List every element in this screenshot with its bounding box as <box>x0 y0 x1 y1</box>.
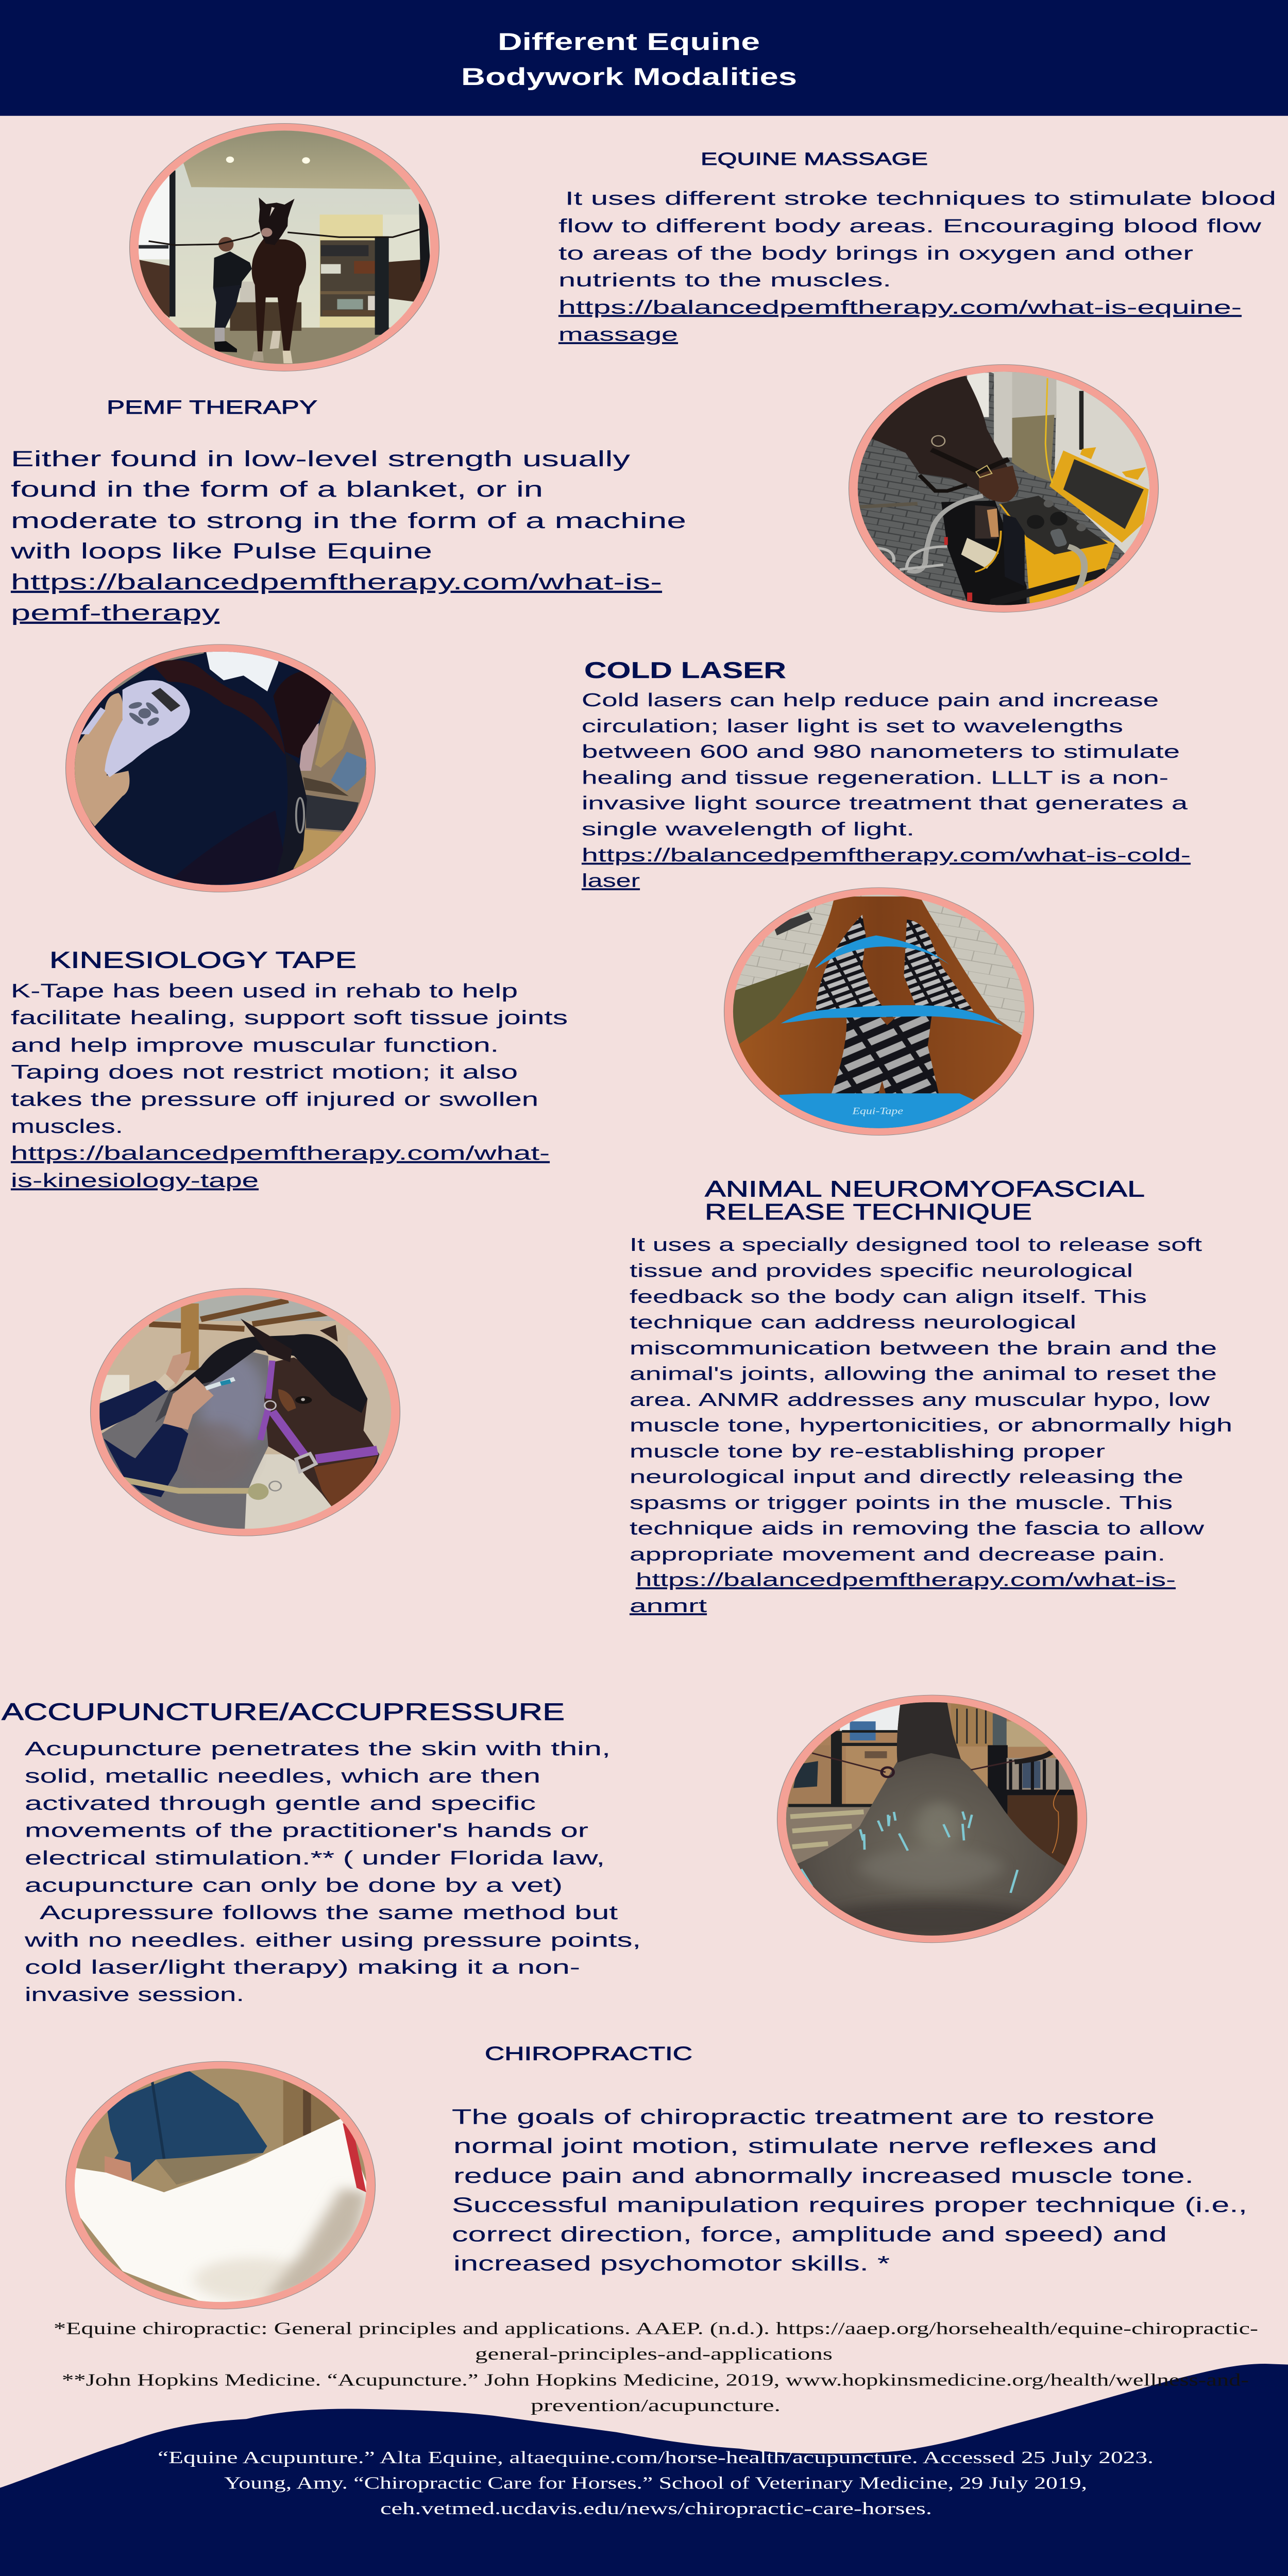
text: pemf therapy: pemf-therapy <box>11 601 219 625</box>
text: pemf therapy: found in the form of a blanket, or in <box>11 478 543 502</box>
references: dark: prevention/acupuncture. <box>531 2396 781 2415</box>
text: anmr: feedback so the body can align itself. This <box>630 1286 1147 1307</box>
text: pemf therapy: Either found in low-level strength usually <box>11 447 630 471</box>
text: anmr: https://balancedpemftherapy.com/what-is- <box>636 1569 1176 1590</box>
text: anmr: area. ANMR addresses any muscular hypo, low <box>630 1389 1210 1410</box>
text: chiropractic: The goals of chiropractic treatment are to restore <box>452 2105 1155 2128</box>
photo: anmr tool on horse neck <box>90 1287 401 1536</box>
text: cold laser: between 600 and 980 nanometers to stimulate <box>582 741 1180 762</box>
text: kinesiology tape: is-kinesiology-tape <box>11 1170 259 1192</box>
text: equine massage: massage <box>558 324 678 345</box>
text: chiropractic: Successful manipulation requires proper technique (i.e., <box>452 2193 1247 2216</box>
heading: equine massage: EQUINE MASSAGE <box>701 149 928 169</box>
heading: acupuncture: ACCUPUNCTURE/ACCUPRESSURE <box>2 1699 565 1725</box>
photo: chiropractic <box>65 2061 376 2310</box>
text: chiropractic <box>452 2105 1247 2275</box>
horse <box>252 197 306 363</box>
text: anmr <box>630 1234 1232 1616</box>
text: acupuncture: Acupressure follows the same method but <box>40 1902 618 1924</box>
text: acupuncture: invasive session. <box>25 1984 244 2006</box>
text: equine massage: It uses different stroke techniques to stimulate blood <box>565 188 1276 209</box>
heading: cold laser: COLD LASER <box>584 657 786 683</box>
photo: kinesiology tape <box>723 887 1035 1136</box>
text: cold laser: https://balancedpemftherapy.com/what-is-cold- <box>582 844 1191 866</box>
text: kinesiology tape <box>11 980 568 1192</box>
photo: equine massage <box>129 123 440 372</box>
text: cold laser: healing and tissue regeneration. LLLT is a non- <box>582 767 1168 788</box>
references: dark: general-principles-and-applications <box>475 2345 833 2364</box>
photo: acupuncture needles <box>776 1694 1088 1943</box>
text: kinesiology tape: https://balancedpemftherapy.com/what- <box>11 1143 550 1164</box>
text: acupuncture: with no needles. either using pressure points, <box>24 1929 641 1951</box>
text: pemf therapy: with loops like Pulse Equine <box>10 539 432 564</box>
text: cold laser: single wavelength of light. <box>582 819 914 840</box>
header banner <box>0 0 1288 116</box>
text: chiropractic: reduce pain and abnormally increased muscle tone. <box>453 2164 1194 2188</box>
text: anmr: miscommunication between the brain and the <box>630 1337 1217 1359</box>
text: cold laser: circulation; laser light is set to wavelengths <box>582 716 1123 737</box>
text: acupuncture: Acupuncture penetrates the skin with thin, <box>25 1738 611 1760</box>
text: equine massage: https://balancedpemftherapy.com/what-is-equine- <box>558 296 1242 318</box>
text: anmr: technique can address neurological <box>630 1312 1076 1332</box>
text: anmr: It uses a specially designed tool to release soft <box>630 1234 1202 1255</box>
text: cold laser: invasive light source treatment that generates a <box>582 793 1188 814</box>
text: pemf therapy: moderate to strong in the form of a machine <box>11 509 686 533</box>
text: anmr: muscle tone, hypertonicities, or abnormally high <box>630 1415 1232 1435</box>
references: light: Young, Amy. “Chiropractic Care for Horses.” School of Veterinary Medicine, 29 July 2019, <box>224 2473 1087 2493</box>
text: acupuncture: cold laser/light therapy) making it a non- <box>25 1957 580 1978</box>
text: acupuncture <box>24 1738 641 2006</box>
references: dark: *Equine chiropractic: General principles and applications. AAEP. (n.d.). https://aaep.org/horsehealth/equine-chiropractic- <box>54 2319 1258 2338</box>
text: equine massage: nutrients to the muscles. <box>558 269 891 291</box>
heading: pemf therapy: PEMF THERAPY <box>107 397 317 418</box>
text: kinesiology tape: Taping does not restrict motion; it also <box>11 1061 518 1083</box>
text: anmr: neurological input and directly releasing the <box>630 1466 1183 1487</box>
text: anmr: technique aids in removing the fascia to allow <box>630 1518 1205 1538</box>
woman <box>213 237 252 352</box>
photo: pemf machine <box>848 364 1159 613</box>
heading: anmr <box>705 1176 1145 1225</box>
text: acupuncture: movements of the practitioner's hands or <box>25 1820 588 1841</box>
references: light: ceh.vetmed.ucdavis.edu/news/chiropractic-care-horses. <box>380 2499 932 2518</box>
text: equine massage: to areas of the body brings in oxygen and other <box>558 242 1193 264</box>
text: pemf therapy <box>10 447 686 625</box>
text: anmr: anmrt <box>630 1595 707 1616</box>
footer wave <box>0 2364 1288 2576</box>
text: chiropractic: normal joint motion, stimulate nerve reflexes and <box>453 2134 1157 2158</box>
text: anmr: appropriate movement and decrease pain. <box>630 1544 1165 1565</box>
text: cold laser <box>582 690 1191 891</box>
text: anmr: tissue and provides specific neurological <box>630 1260 1133 1281</box>
heading: anmr: RELEASE TECHNIQUE <box>705 1199 1032 1225</box>
heading: kinesiology tape: KINESIOLOGY TAPE <box>49 947 357 973</box>
text: acupuncture: acupuncture can only be done by a vet) <box>25 1874 563 1896</box>
text: kinesiology tape: facilitate healing, support soft tissue joints <box>11 1007 568 1029</box>
text: chiropractic: correct direction, force, amplitude and speed) and <box>452 2222 1167 2246</box>
references: dark: **John Hopkins Medicine. “Acupuncture.” John Hopkins Medicine, 2019, www.hopkinsmedicine.org/health/wellness-and- <box>62 2370 1249 2389</box>
text: anmr: animal's joints, allowing the animal to reset the <box>630 1363 1217 1384</box>
text: cold laser: Cold lasers can help reduce pain and increase <box>582 690 1159 710</box>
text: kinesiology tape: and help improve muscular function. <box>11 1035 499 1056</box>
text: chiropractic: increased psychomotor skills. * <box>453 2251 890 2275</box>
text: anmr: spasms or trigger points in the muscle. This <box>630 1492 1173 1513</box>
heading: chiropractic: CHIROPRACTIC <box>485 2043 692 2064</box>
text: kinesiology tape: muscles. <box>11 1116 123 1138</box>
text: kinesiology tape: K-Tape has been used in rehab to help <box>11 980 518 1002</box>
needles <box>801 1811 1018 1893</box>
heading: anmr: ANIMAL NEUROMYOFASCIAL <box>705 1176 1145 1201</box>
text: anmr: muscle tone by re-establishing proper <box>630 1440 1105 1462</box>
text: cold laser: laser <box>582 870 640 891</box>
photo: cold laser <box>65 644 376 893</box>
title <box>461 28 797 90</box>
title: Bodywork Modalities <box>461 63 797 90</box>
references: dark <box>54 2319 1258 2415</box>
text: equine massage <box>558 188 1276 345</box>
text: acupuncture: activated through gentle and specific <box>25 1792 536 1815</box>
text: acupuncture: solid, metallic needles, which are then <box>25 1765 540 1787</box>
text: pemf therapy: https://balancedpemftherapy.com/what-is- <box>11 570 662 595</box>
title: Different Equine <box>498 28 760 55</box>
photo: kinesiology tape: Equi-Tape <box>852 1105 903 1116</box>
references: light: “Equine Acupunture.” Alta Equine, altaequine.com/horse-health/acupuncture. Accessed 25 July 2023. <box>158 2448 1154 2467</box>
text: kinesiology tape: takes the pressure off injured or swollen <box>11 1089 538 1110</box>
text: acupuncture: electrical stimulation.** ( under Florida law, <box>25 1848 605 1869</box>
references: light <box>158 2448 1154 2518</box>
text: equine massage: flow to different body areas. Encouraging blood flow <box>558 215 1262 236</box>
